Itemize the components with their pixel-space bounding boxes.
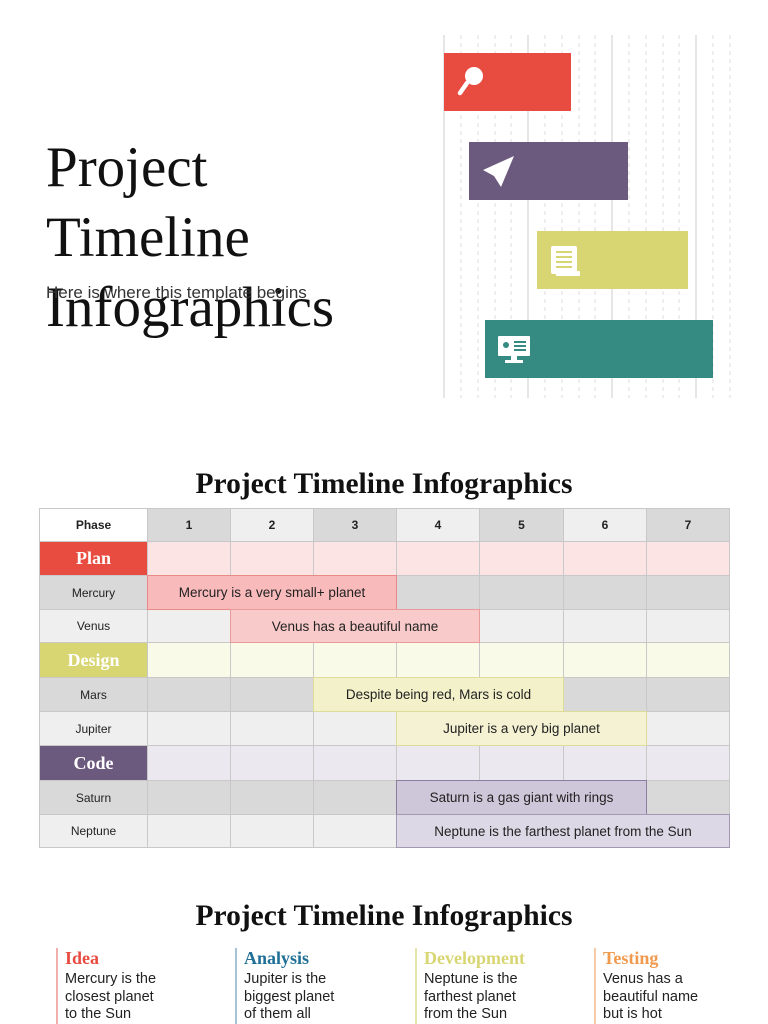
timeline table: Phase: [76, 518, 111, 532]
timeline table: 7: [685, 518, 691, 532]
bar: send (purple): [469, 142, 628, 200]
bar: venus: Venus has a beautiful name: [272, 618, 438, 634]
bar: mercury: Mercury is a very small+ planet: [179, 585, 365, 600]
column: testing: [594, 948, 754, 1024]
column: testing: Venus has a beautiful name but is hot: [603, 971, 698, 1022]
timeline table: Jupiter: [75, 722, 112, 736]
bar: mars: Despite being red, Mars is cold: [346, 687, 531, 702]
timeline table: Saturn: [76, 790, 111, 804]
title: Project: [46, 136, 207, 199]
table heading: Project Timeline Infographics: [196, 468, 572, 500]
column: analysis: [235, 948, 395, 1024]
title: [46, 136, 334, 339]
timeline table: 4: [435, 518, 441, 532]
column: idea: Mercury is the closest planet to the Sun: [65, 971, 156, 1022]
bar: neptune: Neptune is the farthest planet from the Sun: [434, 824, 692, 838]
bar: research (red): [444, 53, 571, 111]
column: idea: Idea: [65, 948, 99, 968]
timeline table: Mercury: [72, 586, 115, 600]
bar: venus: [230, 609, 480, 643]
icon: document: [551, 246, 580, 276]
bar: document (yellow): [537, 231, 688, 289]
timeline table: Neptune: [71, 824, 116, 838]
bar: saturn: [396, 780, 647, 815]
timeline table: 6: [602, 518, 608, 532]
gantt illustration: [443, 35, 730, 398]
column: analysis: Analysis: [244, 948, 309, 968]
column: development: Development: [424, 948, 525, 968]
bar: mercury: [147, 575, 397, 610]
bar: presentation (teal): [485, 320, 713, 378]
icon: paper plane: [483, 156, 514, 187]
bar: jupiter: Jupiter is a very big planet: [443, 721, 600, 736]
timeline table: 1: [186, 518, 192, 532]
bar: jupiter: [396, 711, 647, 746]
timeline table: Design: [67, 650, 120, 670]
timeline table: Plan: [76, 548, 111, 568]
subtitle: Here is where this template begins: [46, 283, 307, 302]
timeline table: 3: [352, 518, 358, 532]
column: testing: Testing: [603, 948, 658, 968]
timeline table: Venus: [77, 619, 110, 633]
timeline table: 5: [518, 518, 525, 532]
icon: monitor: [498, 336, 530, 363]
title: Timeline: [46, 206, 250, 269]
bar: saturn: Saturn is a gas giant with rings: [430, 790, 613, 805]
bar: mars: [313, 677, 564, 712]
timeline table: 2: [269, 518, 275, 532]
timeline table: Mars: [80, 688, 107, 702]
icon: magnifier: [460, 67, 483, 93]
timeline table: Code: [74, 752, 114, 772]
title: Infographics: [46, 276, 334, 339]
column: development: [415, 948, 575, 1024]
column: development: Neptune is the farthest planet from the Sun: [424, 971, 518, 1022]
bar: neptune: [396, 814, 730, 848]
second heading: Project Timeline Infographics: [196, 900, 572, 932]
column: analysis: Jupiter is the biggest planet of them all: [244, 971, 334, 1022]
column: idea: [56, 948, 216, 1024]
